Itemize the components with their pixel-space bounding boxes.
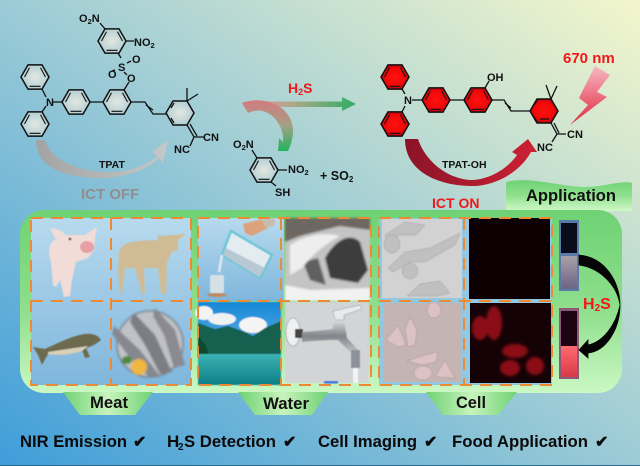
molecule: TPAT-OH: CN	[567, 129, 583, 141]
feature: H2S Detection: ✔	[283, 434, 296, 451]
label: H2S reagent: H	[288, 80, 298, 96]
feature: NIR Emission: ✔	[133, 434, 146, 451]
label: H2S reagent: S	[303, 80, 312, 96]
arrow: ICT on	[405, 139, 537, 186]
molecule: thiol by-product: SH	[275, 187, 290, 199]
photo: waterfall	[285, 218, 370, 301]
tab: Water: Water	[263, 394, 309, 413]
arrow: by-product curve	[242, 100, 293, 151]
label: H2S cuvette: H	[583, 296, 595, 313]
photo: mountain lake	[195, 302, 281, 385]
molecule: thiol by-product: 2	[242, 143, 246, 152]
molecule: thiol by-product: O	[233, 139, 242, 151]
photo: jug and glass	[207, 218, 275, 297]
molecule: thiol by-product: 2	[304, 168, 309, 177]
arrow: cuvette change	[579, 255, 620, 358]
feature: Food Application: ✔	[595, 434, 608, 451]
feature: Cell Imaging: ✔	[424, 434, 437, 451]
molecule: TPAT-OH	[381, 65, 583, 154]
photo: faucet	[285, 302, 369, 384]
molecule: TPAT probe: N	[46, 97, 54, 109]
molecule: TPAT probe	[21, 13, 219, 156]
photo: cow	[118, 234, 186, 294]
feature: H2S Detection: S Detection	[184, 432, 276, 451]
dashes: cell grid	[379, 218, 552, 385]
molecule: TPAT-OH: NC	[537, 142, 553, 154]
arrow: ICT off	[36, 140, 168, 178]
molecule: TPAT probe: N	[92, 13, 100, 25]
label: H2S reagent: 2	[298, 87, 303, 97]
label: plus SO2: 2	[349, 175, 354, 184]
tab: Cell: Cell	[456, 393, 486, 412]
banner: Application: Application	[526, 186, 616, 205]
label: H2S cuvette: S	[600, 296, 611, 313]
molecule: TPAT probe: NC	[174, 144, 190, 156]
molecule: TPAT probe: O	[108, 69, 117, 81]
molecule: TPAT probe: 2	[150, 41, 155, 50]
label: 670 nm: 670 nm	[563, 50, 615, 67]
label: ICT OFF: ICT OFF	[81, 186, 139, 203]
feature list	[20, 432, 608, 453]
molecule: thiol by-product: NO	[288, 164, 304, 176]
molecule: thiol by-product: N	[246, 139, 254, 151]
label: TPAT: TPAT	[99, 159, 125, 171]
tab: Cell	[426, 392, 517, 415]
molecule: TPAT probe: S	[118, 62, 125, 74]
panel: applications	[20, 210, 622, 393]
cuvette: after H2S	[559, 308, 579, 379]
label: TPAT-OH: TPAT-OH	[442, 159, 487, 171]
banner: Application	[506, 180, 632, 211]
feature: NIR Emission: NIR Emission	[20, 432, 127, 451]
molecule: TPAT probe: NO	[134, 37, 150, 49]
image: red fluorescence, with probe	[470, 303, 551, 383]
molecule: TPAT-OH: OH	[487, 72, 504, 84]
feature: Food Application: Food Application	[452, 432, 588, 451]
molecule: TPAT-OH: N	[404, 95, 412, 107]
label: H2S cuvette: 2	[595, 303, 601, 314]
photo: fish	[33, 334, 101, 365]
group: meat photos	[31, 218, 191, 385]
dashes: meat grid	[31, 218, 191, 385]
molecule: TPAT probe: O	[127, 73, 136, 85]
feature: Cell Imaging: Cell Imaging	[318, 432, 417, 451]
label: plus SO2: + SO	[320, 169, 349, 183]
molecule: TPAT probe: O	[79, 13, 88, 25]
tab: Meat: Meat	[90, 393, 128, 412]
molecule: TPAT probe: 2	[88, 17, 92, 26]
molecule: TPAT probe: CN	[203, 132, 219, 144]
image: bright field, no probe	[382, 219, 462, 298]
cuvette: before H2S	[559, 220, 579, 291]
group: water photos	[195, 218, 371, 385]
tab: Meat	[63, 392, 153, 415]
image: bright field, with probe	[383, 302, 462, 382]
label: ICT ON: ICT ON	[432, 195, 479, 211]
feature: H2S Detection: H	[167, 432, 179, 451]
icon: lightning bolt	[570, 66, 610, 125]
arrow: H2S reaction	[243, 97, 356, 111]
molecule: TPAT probe: O	[132, 54, 141, 66]
dashes: water grid	[198, 218, 371, 385]
molecule: thiol by-product	[233, 139, 309, 199]
feature: H2S Detection: 2	[178, 442, 184, 453]
group: cell images	[379, 218, 552, 385]
photo: shrimp plate	[112, 308, 185, 378]
photo: pig	[49, 227, 97, 297]
feature: H2S Detection	[167, 432, 296, 453]
tab: Water	[238, 392, 328, 415]
image: dark fluorescence, no probe	[469, 218, 550, 299]
